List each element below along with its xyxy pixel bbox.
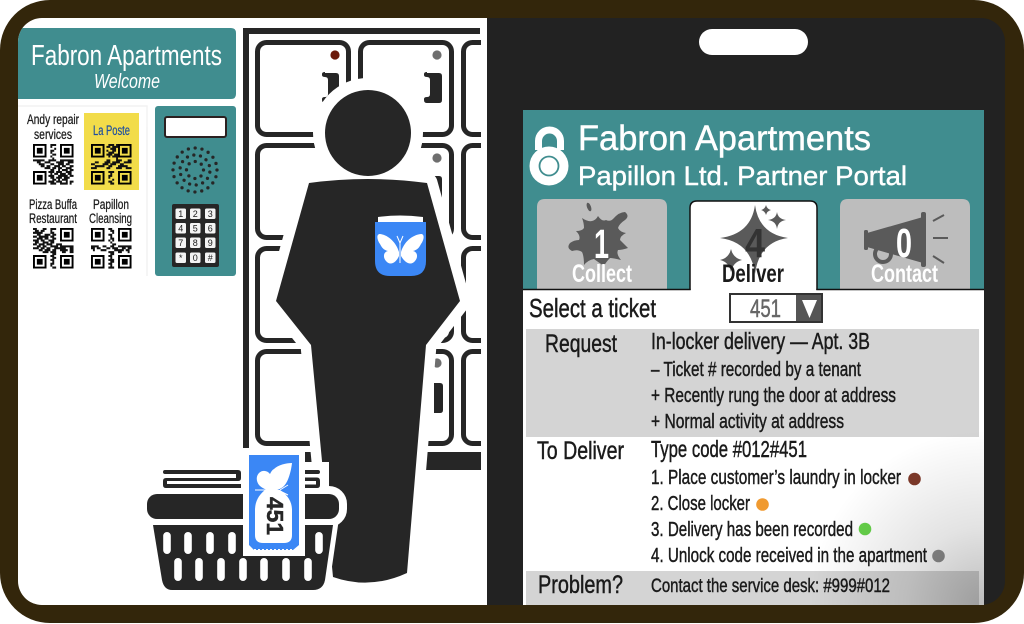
welcome sign [18,28,236,99]
person silhouette [276,78,460,583]
intercom keypad: 6 [208,224,213,234]
QR: Pizza Buffa Restaurant [29,197,77,269]
intercom speaker [173,148,217,192]
laundry ticket 451: 451 [262,497,288,535]
portal header: Fabron Apartments [578,119,871,158]
section: Problem: Problem? [538,571,623,599]
tab: Contact: 0 [896,220,912,266]
intercom keypad: 4 [178,224,183,234]
section: Request: In-locker delivery — Apt. 3B [651,328,870,354]
section: To Deliver: 3. Delivery has been recorded [651,518,853,541]
tab: Deliver (active): 4 [745,220,765,266]
QR: La Poste: La Poste [93,123,130,138]
ticket selector: 451 [750,295,781,323]
QR code directory board [18,106,147,276]
QR: Pizza Buffa Restaurant: Pizza Buffa [29,197,77,212]
locker wall [243,28,481,470]
ticket selector [529,293,822,323]
section: To Deliver: 4. Unlock code received in the apartment [651,544,927,567]
intercom keypad: 9 [208,238,213,248]
section: Request: + Normal activity at address [651,410,844,433]
section: To Deliver: 2. Close locker [651,492,750,515]
QR: Papillon Cleansing: Cleansing [89,211,132,226]
section: Problem: Contact the service desk: #999#012 [651,576,890,597]
welcome sign: Fabron Apartments [31,40,222,72]
tab: Collect [537,199,667,289]
portal header: Papillon Ltd. Partner Portal [578,161,907,191]
tab: Collect: Collect [572,260,632,288]
laundry ticket 451 [249,455,299,550]
intercom keypad: 7 [178,238,183,248]
icon: splat [568,202,628,266]
section: To Deliver: Type code #012#451 [651,436,807,462]
intercom screen [165,117,226,137]
welcome sign: Welcome [94,71,160,93]
QR: Andy repair services [27,112,79,185]
tab: Contact: Contact [871,260,938,288]
smartphone body [487,18,1005,605]
icon: megaphone [864,212,948,267]
intercom keypad: 0 [193,253,198,263]
QR: La Poste [84,113,139,190]
portal header [523,110,984,290]
tab: Contact [840,199,970,289]
QR: Andy repair services: Andy repair [27,112,79,127]
folded laundry [163,470,320,488]
QR: Papillon Cleansing [89,197,132,269]
section: To Deliver: To Deliver [537,437,624,465]
pocket with butterfly app [375,216,426,276]
portal content area [523,290,984,605]
phone speaker slot [699,29,808,55]
intercom keypad: # [208,253,213,263]
ticket selector: Select a ticket [529,293,657,323]
intercom keypad: * [179,253,183,263]
intercom keypad: 3 [208,209,213,219]
section: Problem [526,571,979,605]
icon: padlock [530,130,568,186]
section: Request [526,328,979,437]
intercom keypad: 1 [178,209,183,219]
intercom keypad: 5 [193,224,198,234]
QR: Papillon Cleansing: Papillon [93,197,129,212]
tab: Deliver (active): Deliver [722,260,784,288]
intercom panel [155,106,236,276]
intercom keypad [172,204,219,267]
intercom keypad: 8 [193,238,198,248]
section: Request: – Ticket # recorded by a tenant [651,358,861,381]
section: To Deliver: 1. Place customer’s laundry in locker [651,466,901,489]
icon: sparkles [720,205,788,274]
section: Request: Request [545,330,617,358]
section: To Deliver [537,436,945,567]
tab: Deliver (active) [690,201,817,290]
QR: Andy repair services: services [34,127,72,142]
section: Request: + Recently rung the door at address [651,384,896,407]
laundry basket [147,448,339,590]
tab: Collect: 1 [594,221,609,267]
QR: Pizza Buffa Restaurant: Restaurant [29,211,77,226]
partner portal screen [523,110,984,605]
intercom keypad: 2 [193,209,198,219]
